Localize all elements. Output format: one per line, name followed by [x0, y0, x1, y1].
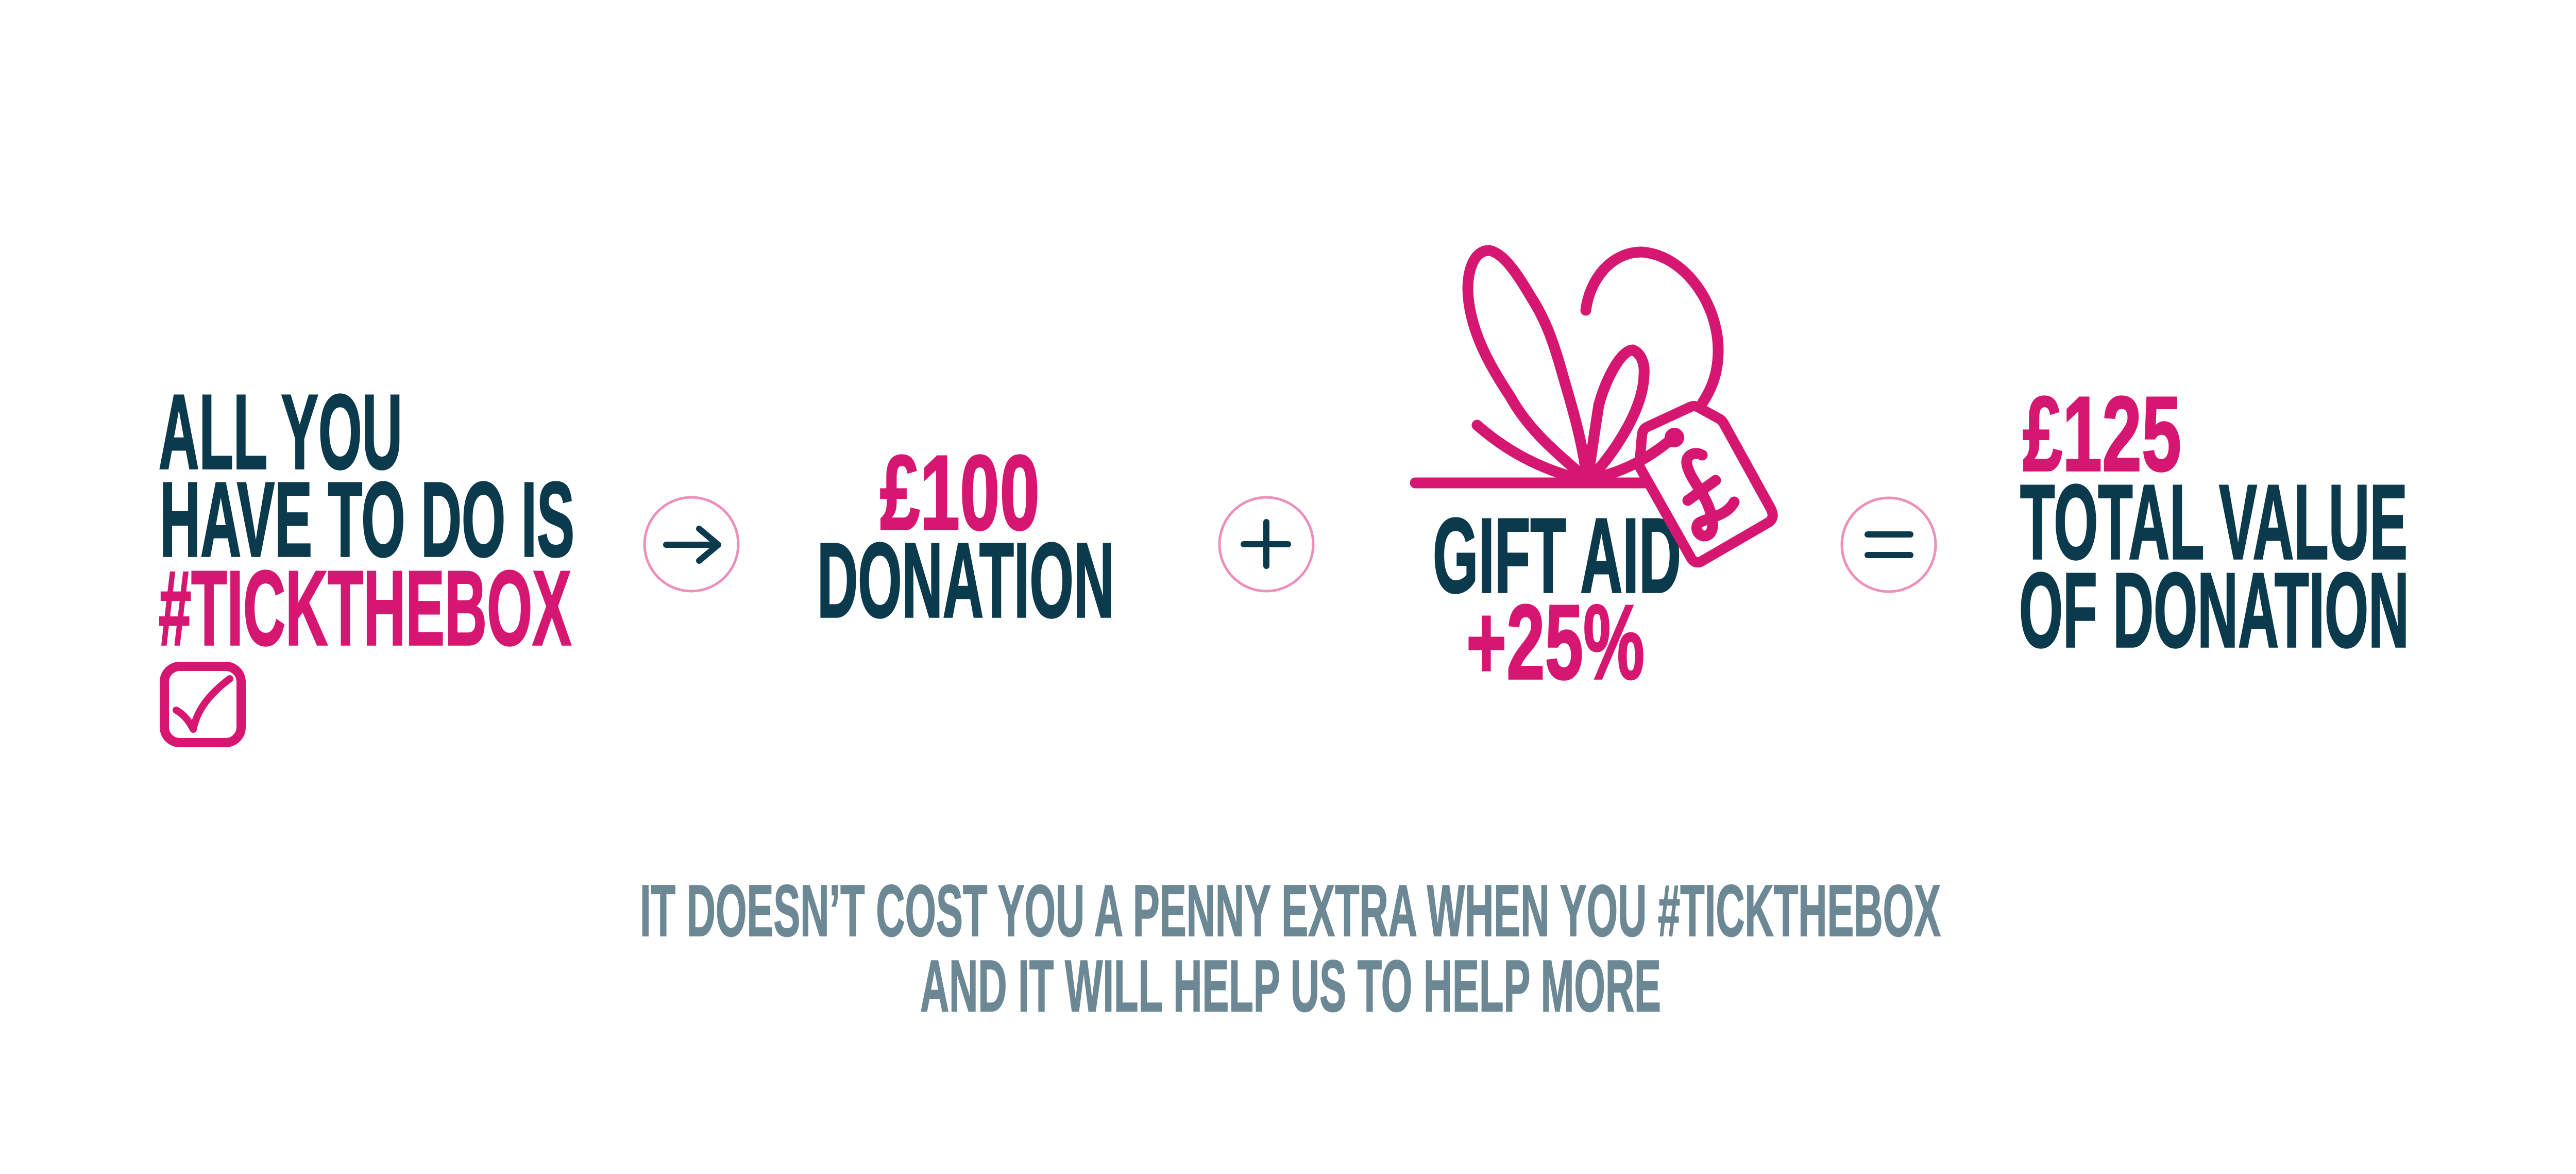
panel: all you have to do — [159, 373, 574, 743]
panel: total value — [2019, 375, 2409, 669]
icon: plus in circle — [1219, 497, 1313, 591]
heading: have to do is: HAVE TO DO IS — [160, 460, 574, 579]
text block: closing message — [640, 870, 1941, 1027]
icon: gift ribbon with pound tag — [1415, 250, 1773, 562]
amount: 100 pounds: £100 — [880, 433, 1040, 552]
label: gift aid: GIFT AID — [1433, 496, 1681, 615]
panel: gift aid — [1415, 250, 1773, 701]
panel: donation amount — [817, 433, 1114, 640]
amount: 125 pounds: £125 — [2023, 375, 2181, 493]
icon: ticked checkbox — [164, 666, 241, 743]
label: donation: DONATION — [817, 521, 1114, 640]
icon: equals in circle — [1842, 498, 1936, 592]
message line two: AND IT WILL HELP US TO HELP MORE — [920, 945, 1661, 1027]
heading: all you: ALL YOU — [159, 373, 402, 491]
icon: arrow in circle — [645, 497, 738, 591]
heading: hashtag: #TICKTHEBOX — [159, 549, 571, 667]
amount: plus 25 percent: +25% — [1466, 583, 1645, 701]
